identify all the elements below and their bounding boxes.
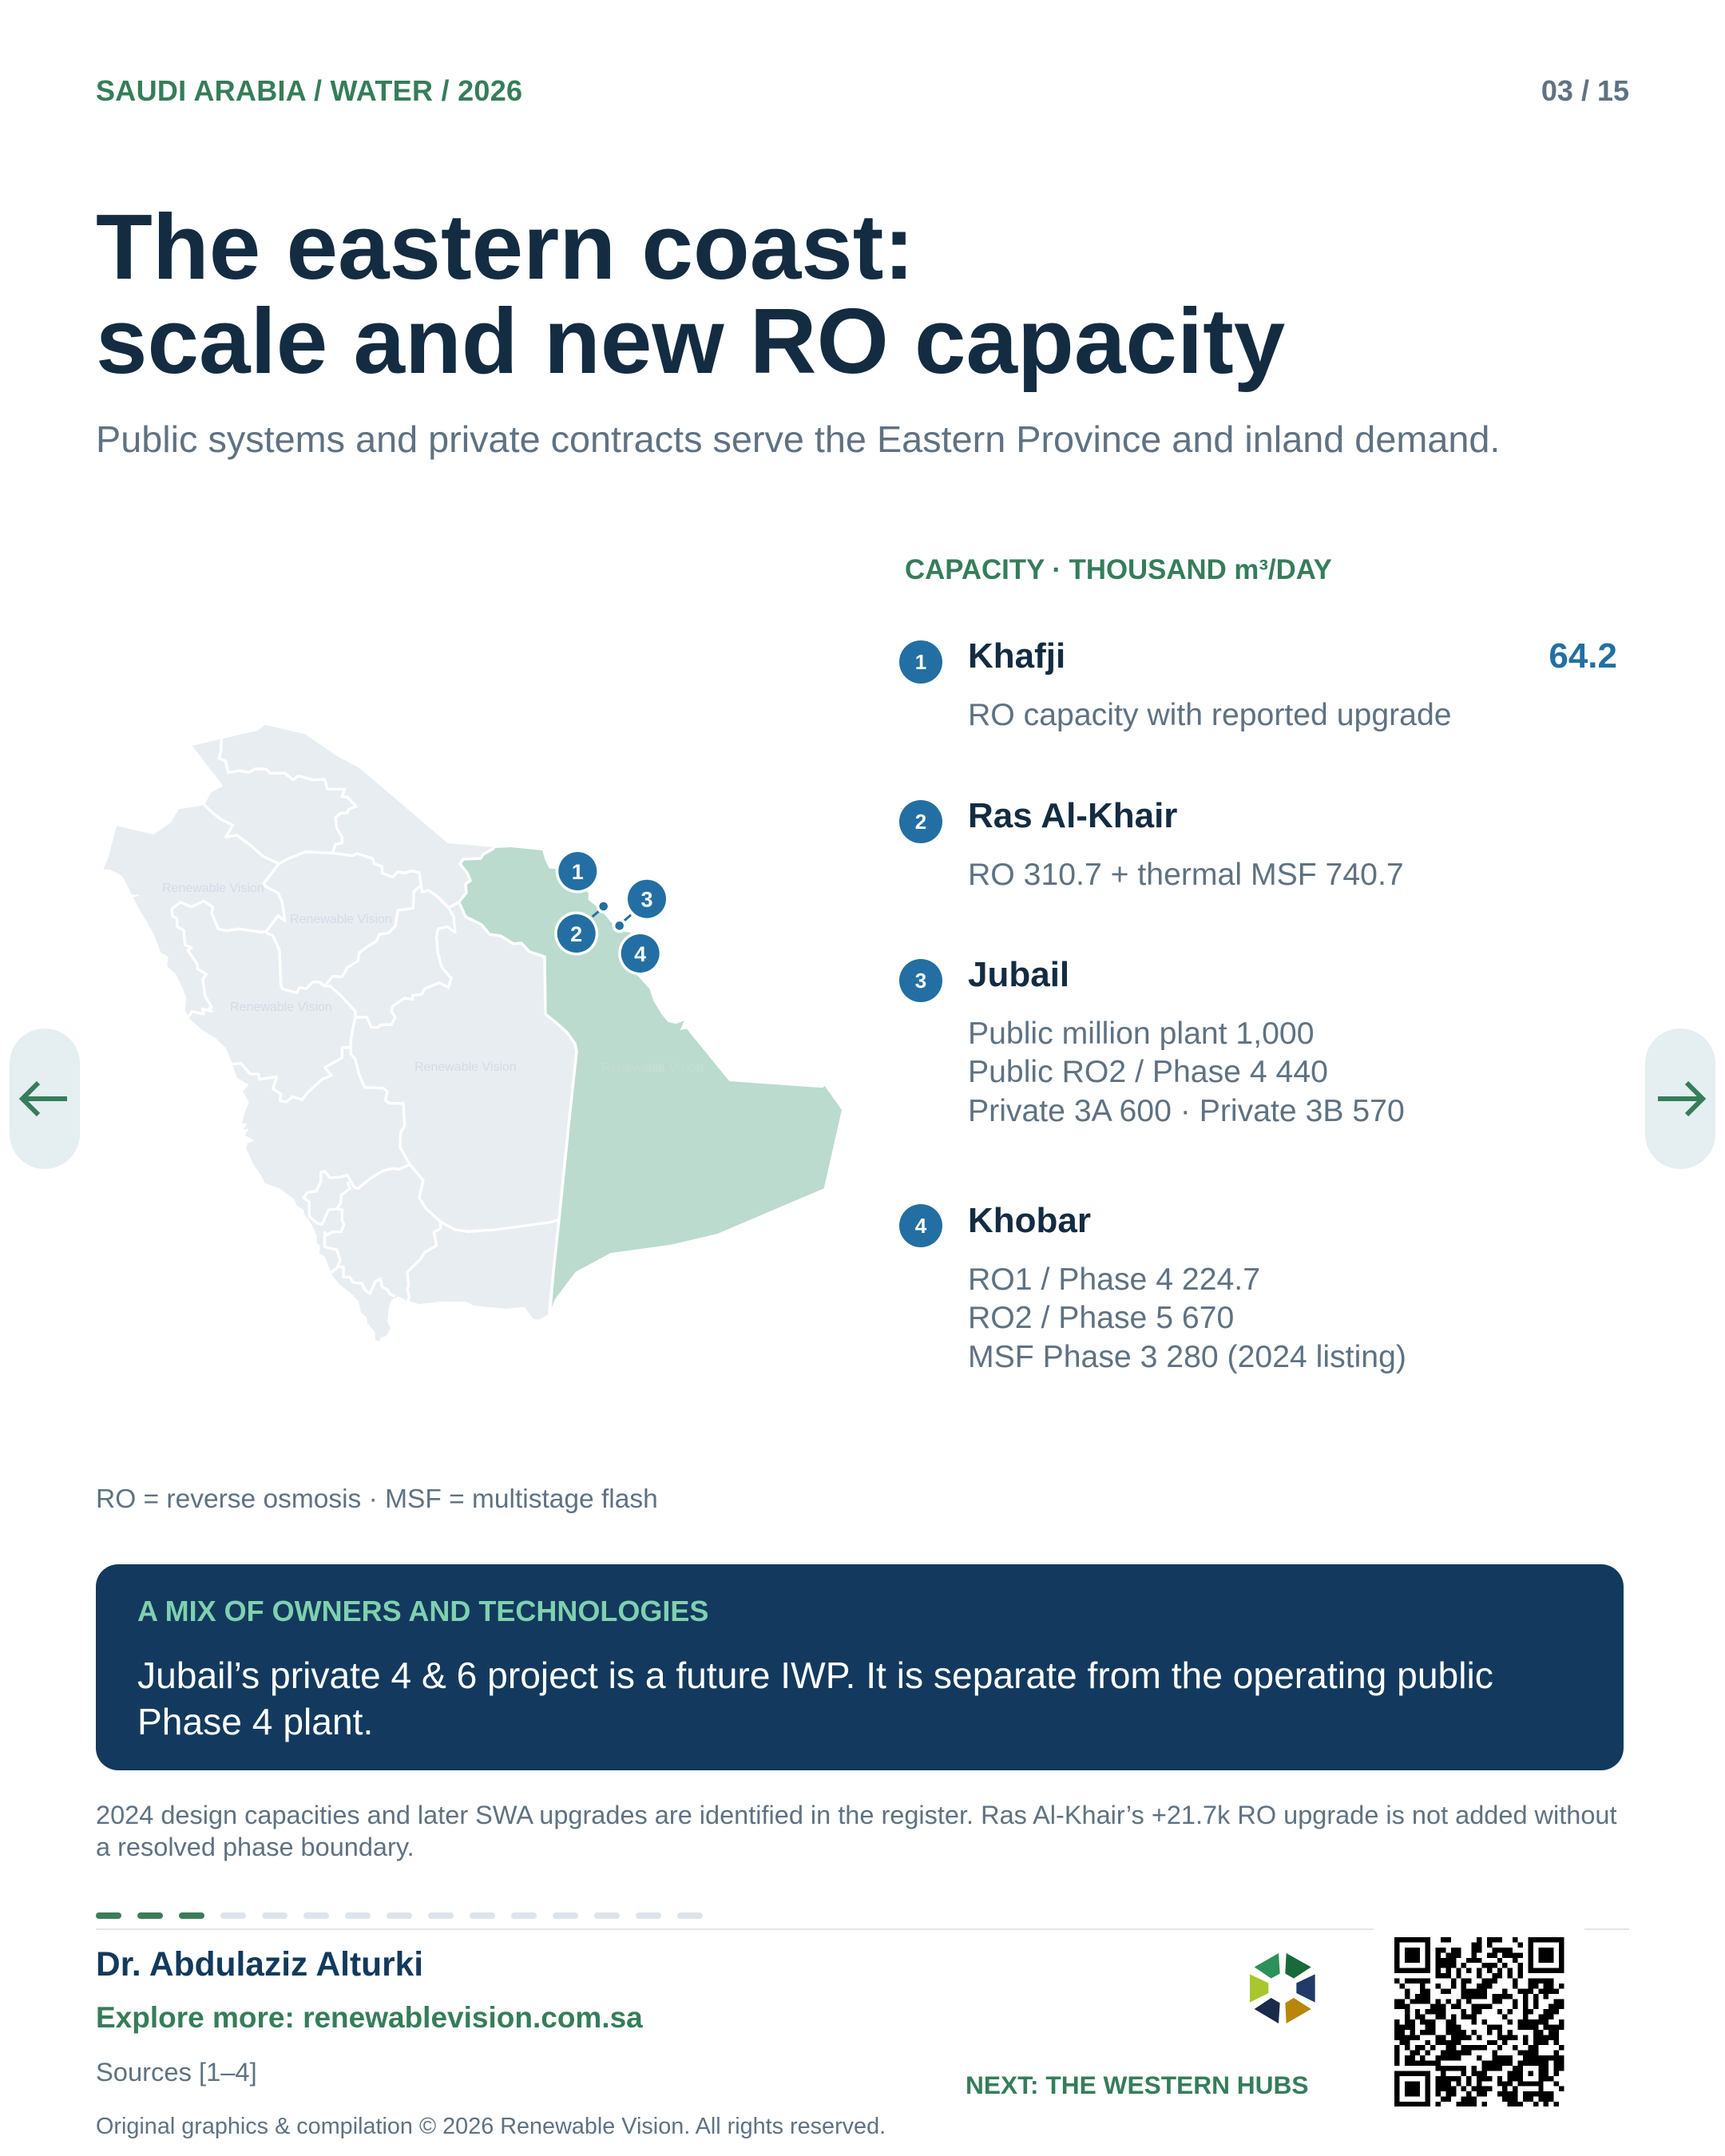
region borders [172, 739, 577, 1314]
item 2 Ras Al-Khair: RO 310.7 + thermal MSF 740.7 [968, 858, 1404, 892]
pin 3 [625, 877, 669, 921]
sources: Sources [1–4] [96, 2057, 257, 2087]
map watermarks: Renewable Vision [162, 882, 264, 895]
subtitle: Public systems and private contracts serve the Eastern Province and inland demand. [96, 418, 1500, 460]
pin 1 [556, 850, 600, 893]
footnote: 2024 design capacities and later SWA upgrades are identified in the register. Ras Al-Khair’s +21.7k RO upgrade is not added without [96, 1801, 1617, 1829]
item 1 Khafji: 1 [915, 650, 926, 674]
next label: NEXT: THE WESTERN HUBS [966, 2071, 1309, 2099]
map watermarks: Renewable Vision [414, 1060, 517, 1074]
nav button: previous [10, 1028, 80, 1169]
item 2 Ras Al-Khair: Ras Al-Khair [968, 796, 1177, 835]
capacity heading: CAPACITY · THOUSAND m³/DAY [905, 554, 1332, 585]
pin connector leaders [593, 911, 631, 921]
site dots [597, 899, 627, 933]
map watermarks: Renewable Vision [230, 1001, 332, 1014]
item 4 Khobar: 4 [915, 1214, 926, 1238]
map watermarks: Renewable Vision [290, 913, 392, 926]
item 1 Khafji [899, 636, 1617, 732]
pin 4 [618, 931, 662, 976]
panel: grey regions of Saudi Arabia [103, 725, 577, 1342]
copyright: Original graphics & compilation © 2026 Renewable Vision. All rights reserved. [96, 2114, 886, 2139]
item 3 Jubail: Private 3A 600 · Private 3B 570 [968, 1094, 1405, 1128]
footnote [96, 1801, 1617, 1861]
item 4 Khobar: RO1 / Phase 4 224.7 [968, 1262, 1260, 1297]
title: scale and new RO capacity [96, 289, 1285, 393]
pin 3: 3 [640, 888, 653, 912]
nav button: next [1645, 1028, 1715, 1169]
callout body: Phase 4 plant. [137, 1701, 373, 1742]
item 1 Khafji: 64.2 [1549, 636, 1617, 676]
pin 2 [554, 912, 598, 955]
panel: Eastern Province highlighted [459, 847, 842, 1307]
item 3 Jubail: Public million plant 1,000 [968, 1017, 1315, 1051]
callout body [137, 1655, 1493, 1742]
title [96, 195, 1285, 393]
item 3 Jubail [899, 955, 1405, 1128]
item 4 Khobar [899, 1201, 1406, 1374]
title: The eastern coast: [96, 195, 914, 299]
pin 2: 2 [570, 922, 582, 946]
callout heading: A MIX OF OWNERS AND TECHNOLOGIES [137, 1595, 708, 1627]
item 1 Khafji: Khafji [968, 636, 1065, 676]
icon: right arrow [1658, 1081, 1706, 1116]
progress dashes [96, 1912, 703, 1919]
website link: Explore more: renewablevision.com.sa [96, 2001, 643, 2034]
item 4 Khobar: RO2 / Phase 5 670 [968, 1301, 1234, 1335]
legend note: RO = reverse osmosis · MSF = multistage flash [96, 1484, 658, 1514]
QR code [1394, 1937, 1564, 2106]
item 4 Khobar: Khobar [968, 1201, 1091, 1240]
footnote: a resolved phase boundary. [96, 1833, 414, 1861]
pin 1: 1 [572, 860, 584, 884]
callout body: Jubail’s private 4 & 6 project is a future IWP. It is separate from the operating public [137, 1655, 1493, 1696]
map watermarks [162, 882, 704, 1075]
item 2 Ras Al-Khair [899, 796, 1404, 892]
item 1 Khafji: RO capacity with reported upgrade [968, 698, 1452, 732]
item 3 Jubail: 3 [915, 969, 926, 993]
item 2 Ras Al-Khair: 2 [915, 810, 926, 834]
item 3 Jubail: Public RO2 / Phase 4 440 [968, 1055, 1328, 1089]
item 4 Khobar: MSF Phase 3 280 (2024 listing) [968, 1340, 1406, 1374]
page number: 03 / 15 [1541, 74, 1629, 107]
item 3 Jubail: Jubail [968, 955, 1069, 994]
pin 4: 4 [634, 942, 646, 966]
section label: SAUDI ARABIA / WATER / 2026 [96, 74, 522, 107]
logo [1250, 1953, 1315, 2023]
icon: left arrow [19, 1081, 67, 1116]
map watermarks: Renewable Vision [601, 1061, 704, 1075]
map pins [554, 850, 669, 976]
author: Dr. Abdulaziz Alturki [96, 1946, 423, 1984]
callout [96, 1564, 1624, 1770]
